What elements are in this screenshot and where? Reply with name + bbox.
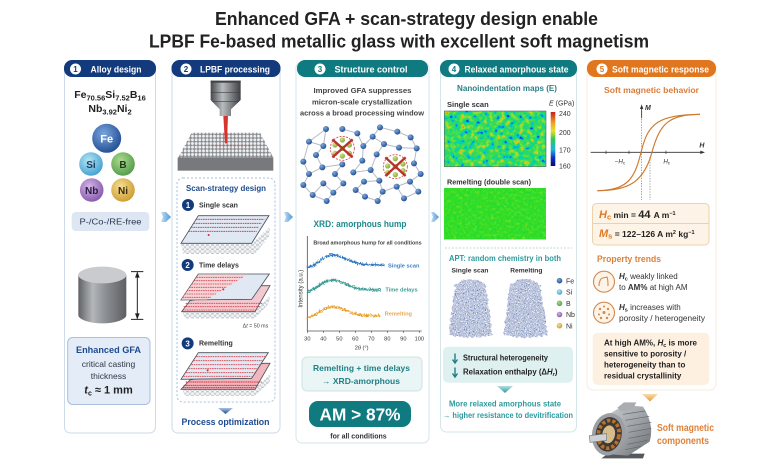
title: Enhanced GFA + scan-strategy design enable — [215, 8, 598, 29]
APT legend: Ni — [566, 323, 573, 330]
APT legend: Nb — [566, 312, 575, 319]
decreases box: ) — [555, 368, 558, 376]
colour scale: 170 — [559, 148, 571, 154]
XRD chart: 60 — [352, 336, 358, 342]
time delays step — [181, 259, 270, 329]
enhanced GFA callout: thickness — [91, 371, 126, 381]
element spheres: Si — [86, 160, 96, 171]
APT reconstructions: Remelting — [510, 267, 542, 274]
alloy formula: 16 — [137, 94, 146, 102]
high AM note: residual crystallinity — [604, 372, 682, 380]
hysteresis loop chart: c — [623, 161, 626, 166]
hysteresis heading: Soft magnetic behavior — [604, 85, 700, 95]
alloy formula — [74, 89, 146, 116]
header: relaxed amorphous state: Relaxed amorphous state — [464, 64, 568, 74]
arrow: structure to relaxed state — [431, 212, 439, 222]
title: LPBF Fe-based metallic glass with excellent soft magnetism — [149, 30, 649, 52]
time delays step: 2 — [185, 261, 190, 270]
APT legend — [557, 278, 575, 330]
arrow: to optimization — [218, 408, 233, 414]
alloy formula: B — [130, 89, 138, 101]
enhanced GFA callout: ≈ 1 mm — [92, 384, 133, 396]
trend: Hc and AM — [594, 271, 688, 292]
XRD chart: Broad amorphous hump for all conditions — [313, 241, 422, 247]
single scan map: Single scan — [447, 100, 489, 109]
for all conditions note: for all conditions — [330, 434, 387, 440]
hysteresis loop chart: c — [668, 161, 671, 166]
high AM note: c — [663, 343, 666, 349]
enhanced GFA callout: critical casting — [82, 359, 135, 369]
header: soft magnetic response: 5 — [600, 65, 605, 74]
laser nozzle over powder bed — [178, 81, 273, 171]
amorphous network with crossed crystal clusters — [300, 124, 424, 204]
magnetic values box — [592, 204, 709, 245]
XRD chart: 40 — [320, 336, 326, 342]
trend: Hs and porosity: increases with — [628, 303, 681, 312]
XRD chart: Time delays — [385, 287, 418, 293]
XRD chart: 90 — [400, 336, 406, 342]
XRD chart — [298, 236, 424, 352]
hysteresis loop chart: H — [663, 158, 668, 165]
relaxed state conclusion — [443, 400, 573, 420]
panel: alloy design — [64, 60, 156, 433]
alloy formula: Ni — [117, 103, 128, 115]
panel: structure control — [296, 60, 429, 443]
colour scale: E (GPa) — [549, 100, 574, 108]
magnetic values box: −1 — [669, 211, 676, 217]
decreases box — [443, 347, 573, 383]
alloy formula: Si — [105, 89, 115, 101]
magnetic values box: 44 A m — [638, 209, 669, 221]
relaxed state conclusion: More relaxed amorphous state — [449, 400, 562, 408]
magnetic values box: min = — [611, 210, 638, 220]
trend: Hs and porosity: porosity / heterogeneity — [619, 314, 705, 323]
high AM note — [593, 333, 709, 385]
soft magnetic components label: Soft magnetic — [657, 423, 714, 434]
XRD chart: 70 — [368, 336, 374, 342]
cast cylinder with dimension arrow — [78, 267, 143, 323]
decreases box: Relaxation enthalpy (ΔH — [463, 368, 553, 376]
XRD chart: Single scan — [388, 263, 420, 269]
header: alloy design — [64, 60, 156, 77]
remelting step: Remelting — [199, 341, 233, 348]
XRD chart: 80 — [384, 336, 390, 342]
scan-strategy box — [177, 178, 275, 402]
alloy formula: 70.56 — [87, 94, 105, 102]
free of P/Co/RE tag — [72, 212, 149, 231]
XRD chart: 2θ (°) — [355, 346, 369, 352]
single scan step — [181, 199, 270, 254]
arrow: alloy to processing — [161, 212, 171, 222]
trend: Hc and AM: to AM% at high AM — [619, 283, 688, 292]
header: LPBF processing: LPBF processing — [200, 64, 270, 74]
process optimization label: Process optimization — [182, 417, 270, 428]
magnetic values box: M — [599, 228, 609, 240]
trend: Hc and AM: weakly linked — [628, 272, 678, 281]
single scan step: 1 — [186, 201, 191, 210]
nanoindentation heading: Nanoindentation maps (E) — [457, 83, 557, 93]
remelting conclusion box: → XRD-amorphous — [322, 376, 400, 386]
scan-strategy box: Scan-strategy design — [186, 183, 266, 193]
panel: soft magnetic response — [587, 60, 716, 390]
header: alloy design: 1 — [73, 65, 78, 74]
AM percentage pill — [309, 401, 411, 427]
trend: Hc and AM: c — [625, 276, 628, 282]
free of P/Co/RE tag: P-/Co-/RE-free — [80, 218, 142, 226]
remelting step — [181, 337, 271, 396]
enhanced GFA callout: t — [84, 384, 89, 396]
enhanced GFA callout — [68, 338, 150, 404]
header: relaxed amorphous state — [440, 60, 577, 77]
magnetic values box: H — [599, 209, 608, 221]
element spheres: Nb — [85, 186, 98, 197]
magnetic values box: −1 — [688, 230, 695, 236]
header: LPBF processing: 2 — [184, 65, 189, 74]
structure control description: micron-scale crystallization — [312, 98, 412, 106]
icon: electric motor — [589, 402, 651, 458]
panel: relaxed amorphous state — [440, 60, 577, 432]
hysteresis loop chart: M — [645, 105, 651, 112]
XRD chart: 30 — [304, 336, 310, 342]
alloy formula: Fe — [74, 89, 87, 101]
APT heading: APT: random chemistry in both — [449, 254, 561, 263]
remelting map: Remelting (double scan) — [447, 178, 531, 186]
element spheres: Fe — [100, 134, 113, 146]
XRD chart: 100 — [415, 336, 424, 342]
trend: Hc and AM: H — [619, 272, 625, 281]
high AM note: At high AM%, H — [604, 338, 663, 348]
panel: LPBF processing — [172, 60, 280, 433]
trend: Hs and porosity — [594, 302, 705, 323]
APT reconstructions — [449, 267, 548, 337]
remelting conclusion box — [302, 357, 422, 391]
trend: Hs and porosity: s — [625, 308, 628, 314]
element spheres: Ni — [118, 186, 128, 197]
XRD chart: Remelting — [385, 311, 413, 317]
time delays step: Δt = 50 ms — [243, 323, 269, 329]
high AM note: is more — [666, 338, 698, 348]
arrow: processing to structure — [284, 212, 293, 222]
header: structure control: Structure control — [334, 64, 408, 74]
remelting step: 3 — [185, 339, 190, 348]
arrow: to components — [642, 394, 658, 402]
remelting conclusion box: Remelting + time delays — [313, 363, 410, 373]
header: soft magnetic response — [587, 60, 716, 77]
high AM note: sensitive to porosity / — [604, 350, 687, 358]
relaxed state conclusion: → higher resistance to devitrification — [443, 411, 573, 420]
magnetic values box: c — [607, 212, 611, 222]
XRD chart: 50 — [336, 336, 342, 342]
element spheres — [79, 124, 135, 202]
decreases box: Structural heterogeneity — [463, 354, 549, 362]
magnetic values box: s — [608, 232, 612, 240]
single scan step: Single scan — [199, 202, 238, 210]
time delays step: Time delays — [199, 262, 239, 269]
structure control description: Improved GFA suppresses — [314, 86, 412, 95]
single scan map — [444, 100, 546, 167]
soft magnetic components label — [657, 423, 714, 447]
colour scale: 160 — [559, 164, 571, 170]
structure control description: across a broad processing window — [300, 108, 424, 118]
hysteresis loop chart: H — [699, 142, 705, 149]
structure control description — [300, 86, 424, 118]
high AM note: heterogeneity than to — [604, 360, 685, 370]
trend: Hs and porosity: H — [619, 303, 625, 312]
decreases box: r — [553, 372, 556, 378]
remelting map — [444, 178, 546, 239]
AM percentage pill: AM > 87% — [320, 404, 401, 424]
property trends heading: Property trends — [597, 254, 661, 264]
magnetic values box: = 122–126 A m — [612, 229, 673, 239]
APT reconstructions: Single scan — [451, 267, 488, 274]
header: structure control — [297, 60, 428, 77]
arrow: to result — [497, 386, 513, 393]
hysteresis loop chart: −H — [615, 158, 623, 165]
APT legend: Fe — [566, 278, 574, 285]
element spheres: B — [119, 160, 127, 171]
alloy formula: 7.52 — [115, 94, 130, 102]
colour scale: 200 — [559, 130, 571, 137]
APT legend: Si — [566, 290, 573, 297]
colour scale — [549, 100, 574, 170]
magnetic values box: kg — [676, 229, 688, 239]
APT legend: B — [566, 301, 571, 308]
title — [149, 8, 649, 52]
header: structure control: 3 — [318, 65, 323, 74]
soft magnetic components label: components — [657, 436, 709, 447]
XRD heading: XRD: amorphous hump — [314, 219, 407, 229]
header: soft magnetic response: Soft magnetic response — [612, 64, 709, 74]
alloy formula: 3.92 — [102, 108, 117, 116]
enhanced GFA callout: Enhanced GFA — [76, 345, 141, 356]
hysteresis loop chart — [591, 104, 705, 200]
XRD chart: Intensity (a.u.) — [298, 270, 304, 308]
alloy formula: Nb — [88, 103, 102, 115]
enhanced GFA callout: c — [88, 390, 92, 398]
header: relaxed amorphous state: 4 — [452, 65, 457, 74]
header: alloy design: Alloy design — [90, 64, 142, 74]
magnetic values box: 2 — [673, 230, 676, 236]
colour scale: 240 — [559, 111, 571, 118]
alloy formula: 2 — [127, 108, 132, 116]
header: LPBF processing — [172, 60, 280, 77]
